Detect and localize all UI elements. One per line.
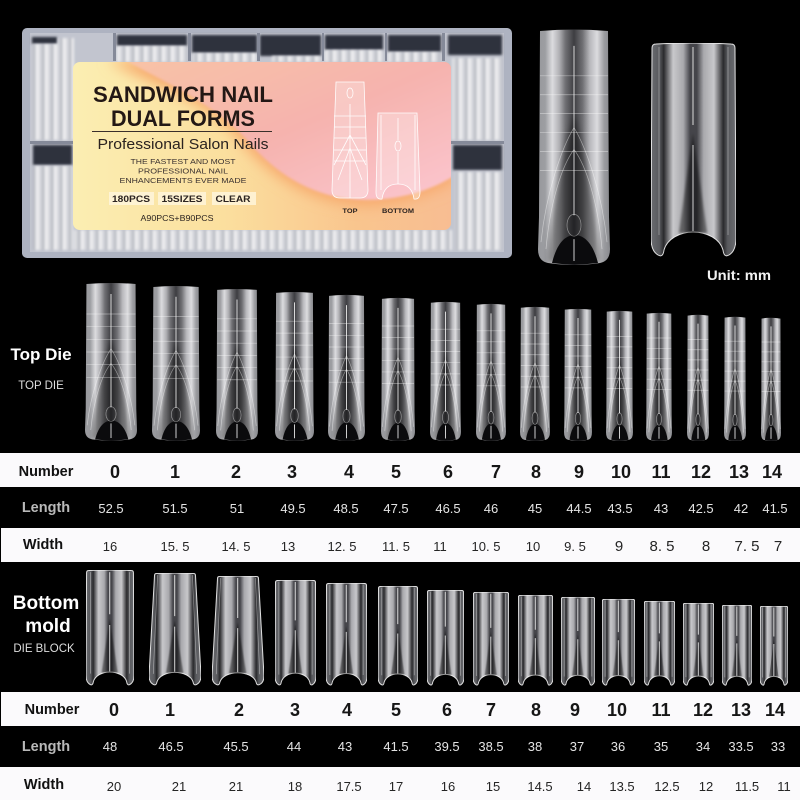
label badges xyxy=(109,192,256,205)
bottom mold: number row: 1 xyxy=(165,700,175,720)
bottom mold: width row: 14 xyxy=(577,779,591,794)
top die: number row: 8 xyxy=(531,462,541,482)
bottom mold: number row: 7 xyxy=(486,700,496,720)
top die: number row: 14 xyxy=(762,462,782,482)
bottom mold: length row: Length xyxy=(22,739,70,755)
label subtitle: Professional Salon Nails xyxy=(98,137,268,153)
label description: PROFESSIONAL NAIL xyxy=(138,166,228,176)
bottom mold: number row: 0 xyxy=(109,700,119,720)
top die: length row: 51.5 xyxy=(162,501,188,516)
label description: ENHANCEMENTS EVER MADE xyxy=(120,176,246,185)
top die: length row: 46.5 xyxy=(435,501,461,516)
bottom mold: width row: 21 xyxy=(229,779,243,794)
bottom mold: width row: 16 xyxy=(441,779,455,794)
bottom mold: length row: 44 xyxy=(287,739,301,754)
top die: number row: 2 xyxy=(231,462,241,482)
large bottom form xyxy=(651,43,736,256)
bottom mold: number row: 6 xyxy=(442,700,452,720)
top die: width row xyxy=(23,537,782,555)
top die: number row: 0 xyxy=(110,462,120,482)
top die: length row: 52.5 xyxy=(98,501,124,516)
product label xyxy=(73,60,455,230)
top die: number row: 4 xyxy=(344,462,354,482)
bottom mold: width row: 15 xyxy=(486,779,500,794)
top die: length row: 41.5 xyxy=(762,501,788,516)
label diagram captions xyxy=(342,208,414,215)
top die: number row: 10 xyxy=(611,462,631,482)
bottom mold: width row: 20 xyxy=(107,779,121,794)
heading: bottom mold: DIE BLOCK xyxy=(13,643,75,655)
bottom mold: width row: 14.5 xyxy=(527,779,553,794)
bottom mold: width row: 11.5 xyxy=(735,779,759,794)
heading: top die: Top Die xyxy=(10,345,72,364)
top die: length row: 43 xyxy=(654,501,668,516)
bottom mold: width row: 17 xyxy=(389,779,403,794)
heading: top die: TOP DIE xyxy=(18,380,64,392)
label title: DUAL FORMS xyxy=(111,106,255,131)
top die: width row: 7 xyxy=(774,538,782,555)
top die: width row: 8. 5 xyxy=(649,538,675,555)
bottom mold: number row: 3 xyxy=(290,700,300,720)
top die: width row: 9 xyxy=(615,538,623,555)
top die: width row: 7. 5 xyxy=(734,538,760,555)
top die: number row xyxy=(19,462,782,482)
bottom mold: number row: 8 xyxy=(531,700,541,720)
top die: length row: 42 xyxy=(734,501,748,516)
bottom mold: length row: 48 xyxy=(103,739,117,754)
bottom mold: number row: 5 xyxy=(391,700,401,720)
bottom mold: number row: 13 xyxy=(731,700,751,720)
top die table xyxy=(0,453,800,562)
top die: number row: 12 xyxy=(691,462,711,482)
heading: bottom mold xyxy=(13,593,79,655)
top die: width row: 13 xyxy=(281,539,295,554)
label diagram: top form xyxy=(332,82,368,198)
bottom mold: number row: 2 xyxy=(234,700,244,720)
heading: bottom mold: mold xyxy=(25,616,71,637)
label diagram: bottom form xyxy=(376,113,420,199)
label quantity: A90PCS+B90PCS xyxy=(140,213,214,223)
top die: width row: 8 xyxy=(702,538,710,555)
top die: length row: 51 xyxy=(230,501,244,516)
label badges: 15SIZES xyxy=(162,194,202,205)
label description xyxy=(120,157,246,185)
top die: number row: 6 xyxy=(443,462,453,482)
bottom mold table xyxy=(0,692,800,800)
top die: number row: Number xyxy=(19,464,74,480)
label title xyxy=(92,82,273,132)
bottom mold nail row xyxy=(86,570,788,685)
bottom mold: length row: 35 xyxy=(654,739,668,754)
top die: length row xyxy=(22,500,788,516)
top die: width row: 11. 5 xyxy=(382,539,410,554)
bottom mold: length row: 39.5 xyxy=(434,739,460,754)
label diagram captions: TOP xyxy=(342,208,358,215)
label badges: CLEAR xyxy=(216,194,251,205)
label title: SANDWICH NAIL xyxy=(93,82,273,107)
top die: length row: Length xyxy=(22,500,70,516)
bottom mold: length row xyxy=(22,739,785,755)
top die: length row: 46 xyxy=(484,501,498,516)
top die: width row: 11 xyxy=(433,539,447,554)
top die: length row: 47.5 xyxy=(383,501,409,516)
bottom mold: number row: 11 xyxy=(651,700,671,720)
bottom mold: width row: 12 xyxy=(699,779,713,794)
bottom mold: length row: 33.5 xyxy=(728,739,754,754)
top die: width row: 15. 5 xyxy=(161,539,189,554)
top die: length row: 48.5 xyxy=(333,501,359,516)
bottom mold: length row: 38 xyxy=(528,739,542,754)
top die: width row: 9. 5 xyxy=(564,539,586,554)
bottom mold: length row: 46.5 xyxy=(158,739,184,754)
label badges: 180PCS xyxy=(112,194,150,205)
top die: width row: 12. 5 xyxy=(328,539,356,554)
top die: length row: 43.5 xyxy=(607,501,633,516)
bottom mold: width row: Width xyxy=(24,777,64,793)
top die: width row: 14. 5 xyxy=(222,539,250,554)
top die: number row: 11 xyxy=(651,462,671,482)
top die: number row: 3 xyxy=(287,462,297,482)
bottom mold: width row: 17.5 xyxy=(336,779,362,794)
top die: width row: 16 xyxy=(103,539,117,554)
top die: number row: 1 xyxy=(170,462,180,482)
bottom mold: width row xyxy=(24,777,791,794)
bottom mold: width row: 18 xyxy=(288,779,302,794)
bottom mold: length row: 36 xyxy=(611,739,625,754)
top die: width row: 10 xyxy=(526,539,540,554)
bottom mold: length row: 37 xyxy=(570,739,584,754)
label description: THE FASTEST AND MOST xyxy=(130,157,236,166)
bottom mold: width row: 11 xyxy=(777,779,791,794)
bottom mold: length row: 45.5 xyxy=(223,739,249,754)
bottom mold: length row: 34 xyxy=(696,739,710,754)
top die: length row: 49.5 xyxy=(280,501,306,516)
bottom mold: length row: 43 xyxy=(338,739,352,754)
bottom mold: width row: 21 xyxy=(172,779,186,794)
top die nail row xyxy=(85,283,781,441)
top die: length row: 42.5 xyxy=(688,501,714,516)
bottom mold: number row: 10 xyxy=(607,700,627,720)
bottom mold: width row: 13.5 xyxy=(609,779,635,794)
bottom mold: length row: 38.5 xyxy=(478,739,504,754)
bottom mold: number row: Number xyxy=(25,702,80,718)
top die: number row: 5 xyxy=(391,462,401,482)
bottom mold: number row: 14 xyxy=(765,700,785,720)
top die: number row: 9 xyxy=(574,462,584,482)
top die: width row: Width xyxy=(23,537,63,553)
bottom mold: number row: 9 xyxy=(570,700,580,720)
label diagram captions: BOTTOM xyxy=(382,208,414,215)
bottom mold: number row xyxy=(25,700,785,720)
product box xyxy=(22,28,512,258)
top die: number row: 13 xyxy=(729,462,749,482)
bottom mold: number row: 4 xyxy=(342,700,352,720)
top die: length row: 44.5 xyxy=(566,501,592,516)
large top form xyxy=(538,29,610,265)
top die: width row: 10. 5 xyxy=(472,539,500,554)
heading: top die xyxy=(10,345,72,392)
heading: bottom mold: Bottom xyxy=(13,593,79,614)
bottom mold: length row: 41.5 xyxy=(383,739,409,754)
top die: length row: 45 xyxy=(528,501,542,516)
bottom mold: number row: 12 xyxy=(693,700,713,720)
bottom mold: length row: 33 xyxy=(771,739,785,754)
unit note: Unit: mm xyxy=(707,267,771,283)
bottom mold: width row: 12.5 xyxy=(654,779,680,794)
top die: number row: 7 xyxy=(491,462,501,482)
